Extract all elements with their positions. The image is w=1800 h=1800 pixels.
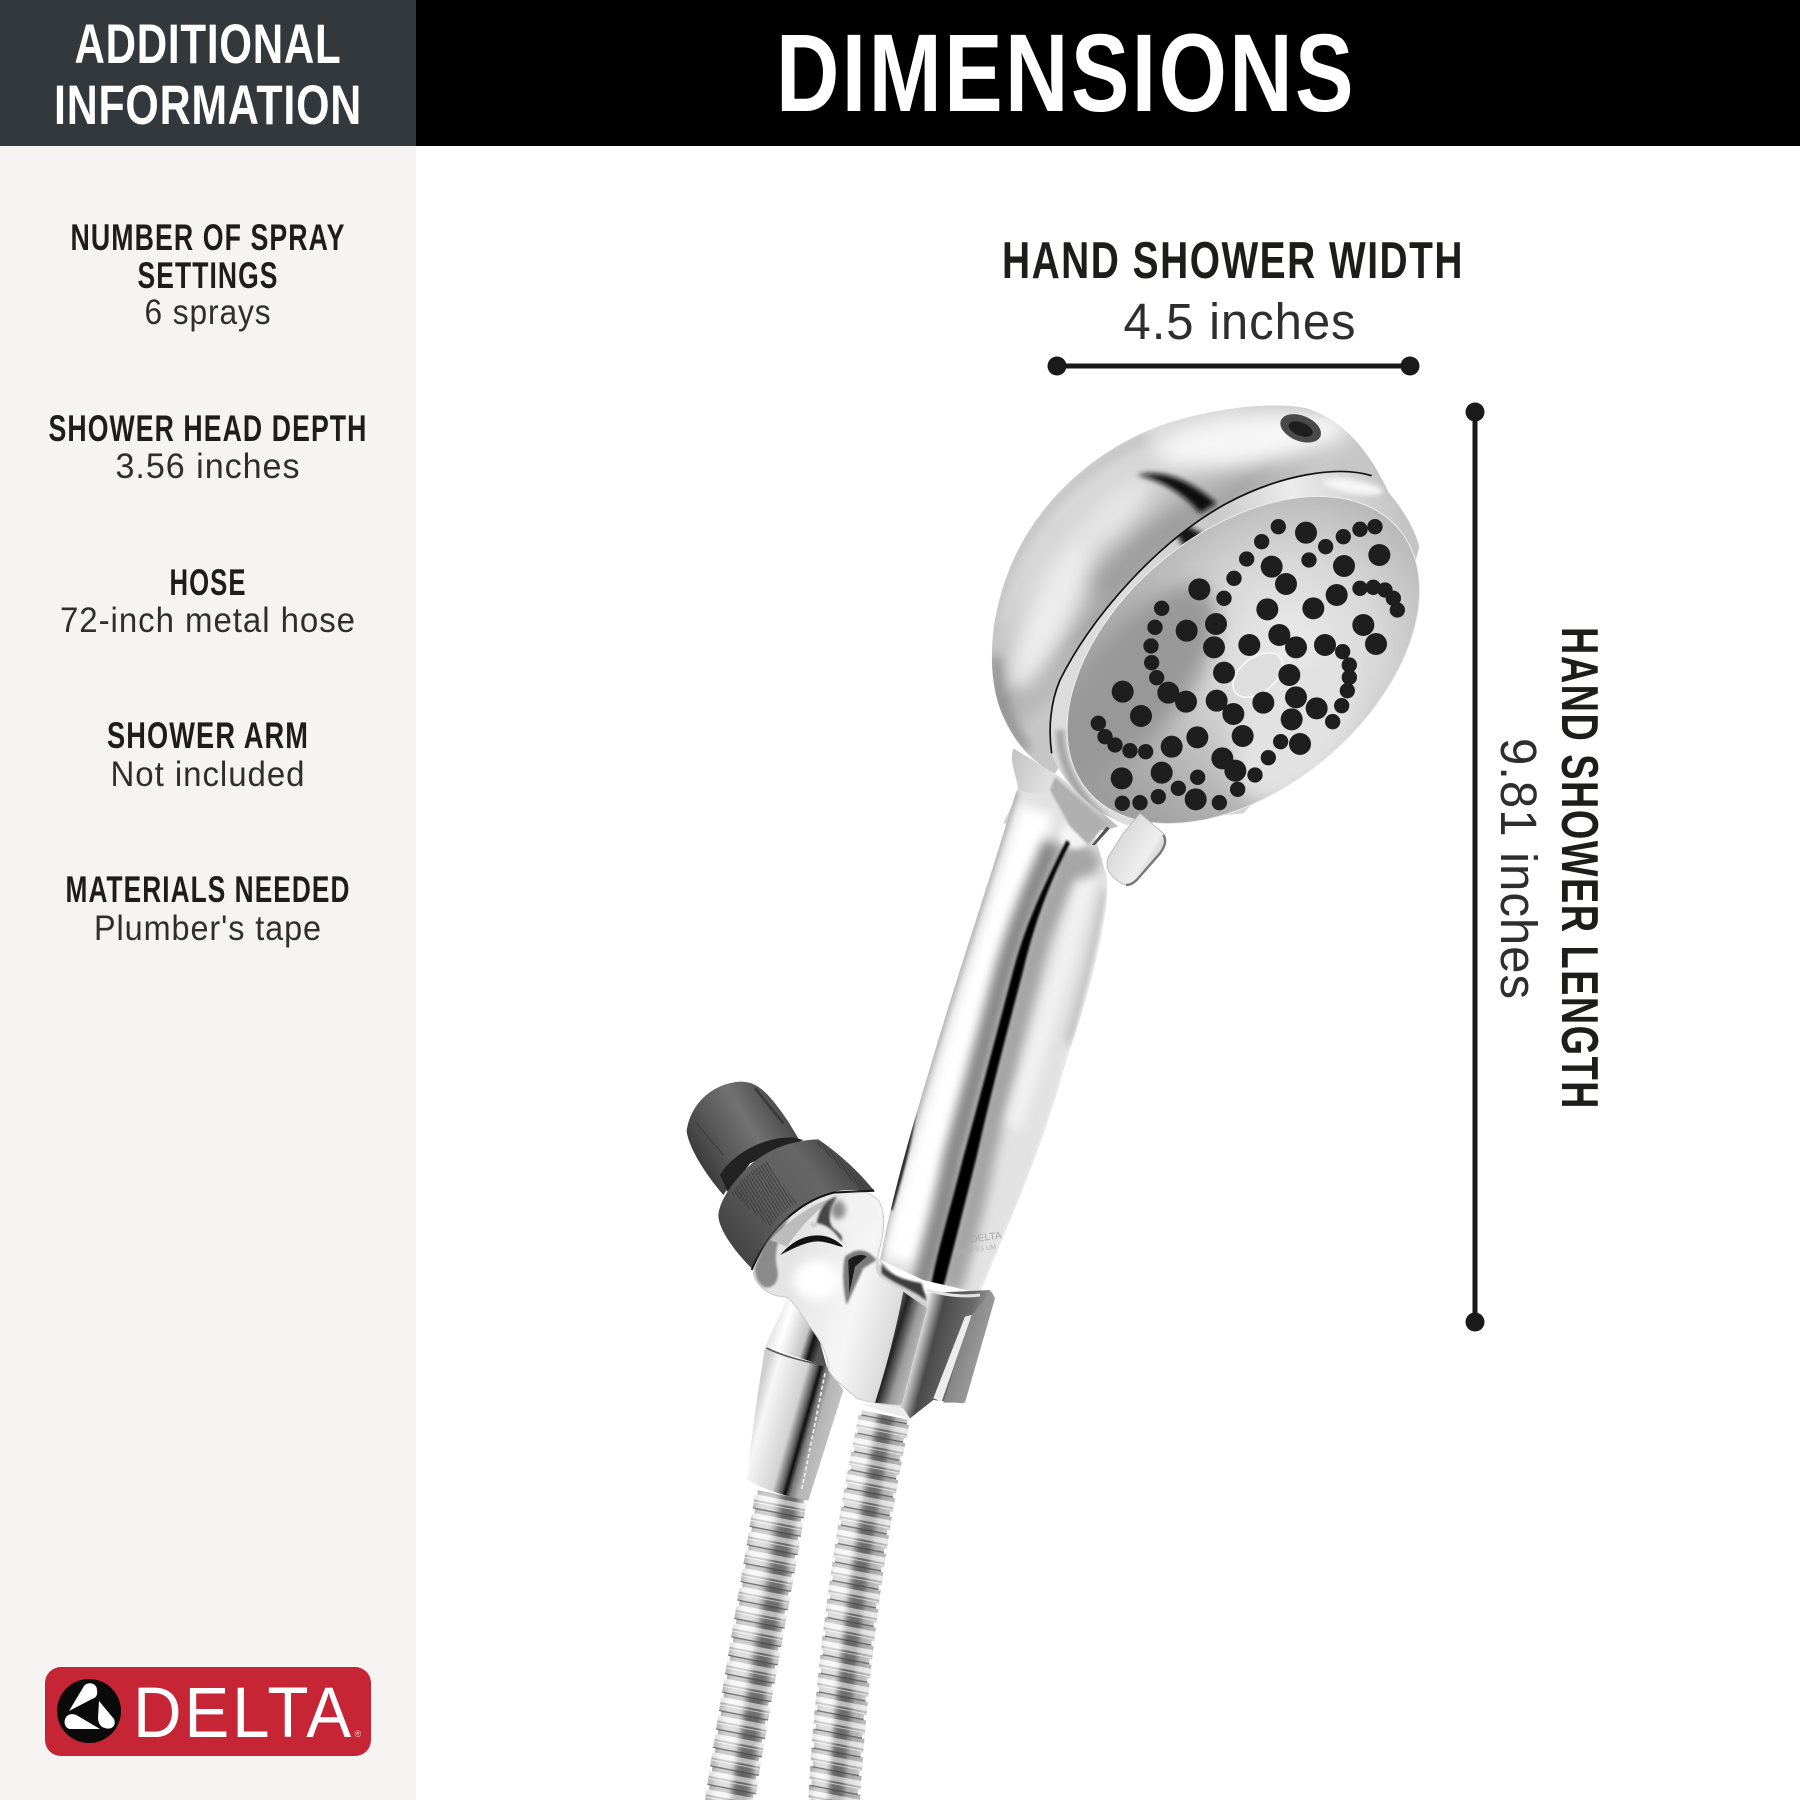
large spray nozzles <box>1111 522 1390 810</box>
head neck <box>1003 748 1118 830</box>
width measurement: label and arrow: 4.5 inches <box>1124 293 1356 350</box>
center button <box>1225 644 1291 706</box>
width measurement: label and arrow: HAND SHOWER WIDTH <box>1002 232 1464 290</box>
handle: DELTA <box>970 1230 1003 1246</box>
chrome swivel body <box>753 1190 927 1405</box>
spec: materials needed <box>66 869 350 948</box>
sidebar heading: INFORMATION <box>54 73 362 136</box>
Delta logo <box>45 1667 371 1756</box>
spec: shower arm: SHOWER ARM <box>107 715 309 756</box>
length measurement: label and arrow: 9.81 inches <box>1490 738 1547 1000</box>
spec: hose: HOSE <box>170 562 246 603</box>
spray selector lever <box>1107 813 1165 885</box>
shell <box>992 406 1389 774</box>
rim <box>1051 472 1420 825</box>
spec: number of spray settings <box>70 217 346 332</box>
spec: shower head depth: SHOWER HEAD DEPTH <box>48 408 368 449</box>
groove ring <box>720 1137 803 1193</box>
spec: materials needed: MATERIALS NEEDED <box>66 869 350 910</box>
title bar: dimensions <box>416 0 1800 146</box>
spray selector port <box>1276 409 1325 448</box>
Delta logo: ® <box>355 1729 362 1739</box>
left hose <box>705 1490 806 1800</box>
back cup of the holder <box>873 1290 993 1418</box>
handle <box>880 790 1107 1291</box>
seam line <box>1050 471 1372 753</box>
Delta logo: DELTA <box>133 1674 354 1753</box>
hoses <box>690 1400 920 1800</box>
spec: shower head depth: 3.56 inches <box>116 447 300 486</box>
shower head <box>992 406 1420 886</box>
length measurement: label and arrow <box>1466 402 1608 1332</box>
chrome reflections <box>780 1235 843 1255</box>
dark knob <box>687 1082 798 1195</box>
width measurement: label and arrow <box>1002 232 1464 376</box>
title bar: dimensions: DIMENSIONS <box>776 12 1356 135</box>
small spray nozzles <box>1091 519 1405 811</box>
length measurement: label and arrow: HAND SHOWER LENGTH <box>1550 627 1608 1110</box>
nut edge shadow <box>752 1191 874 1270</box>
spec: number of spray settings: NUMBER OF SPRAY <box>70 217 346 258</box>
spec: shower head depth <box>48 408 368 486</box>
bottom chrome edge <box>862 1403 910 1418</box>
holder lip <box>876 1260 928 1309</box>
product: hand shower <box>687 393 1482 1800</box>
sidebar heading: ADDITIONAL <box>74 12 342 75</box>
left hose collar and wall elbow <box>747 1300 843 1501</box>
handle: 2.5GPM 9.5 L/M <box>951 1244 997 1257</box>
spec: hose: 72-inch metal hose <box>60 601 356 640</box>
sidebar panel: additional information <box>0 0 416 1800</box>
spec: number of spray settings: 6 sprays <box>144 293 272 332</box>
holder tab <box>943 1292 995 1403</box>
spec: hose <box>60 562 356 640</box>
spray face <box>1068 496 1420 824</box>
spec: shower arm: Not included <box>110 755 306 794</box>
right hose <box>808 1410 910 1800</box>
clip block side face <box>875 1292 927 1405</box>
spec: shower arm <box>107 715 309 794</box>
spec: materials needed: Plumber's tape <box>94 909 322 948</box>
knurled nut <box>718 1139 875 1268</box>
sidebar heading <box>0 0 416 146</box>
connector below head <box>1050 777 1110 845</box>
wall bracket <box>687 1082 995 1418</box>
spec: number of spray settings: SETTINGS <box>138 255 278 296</box>
